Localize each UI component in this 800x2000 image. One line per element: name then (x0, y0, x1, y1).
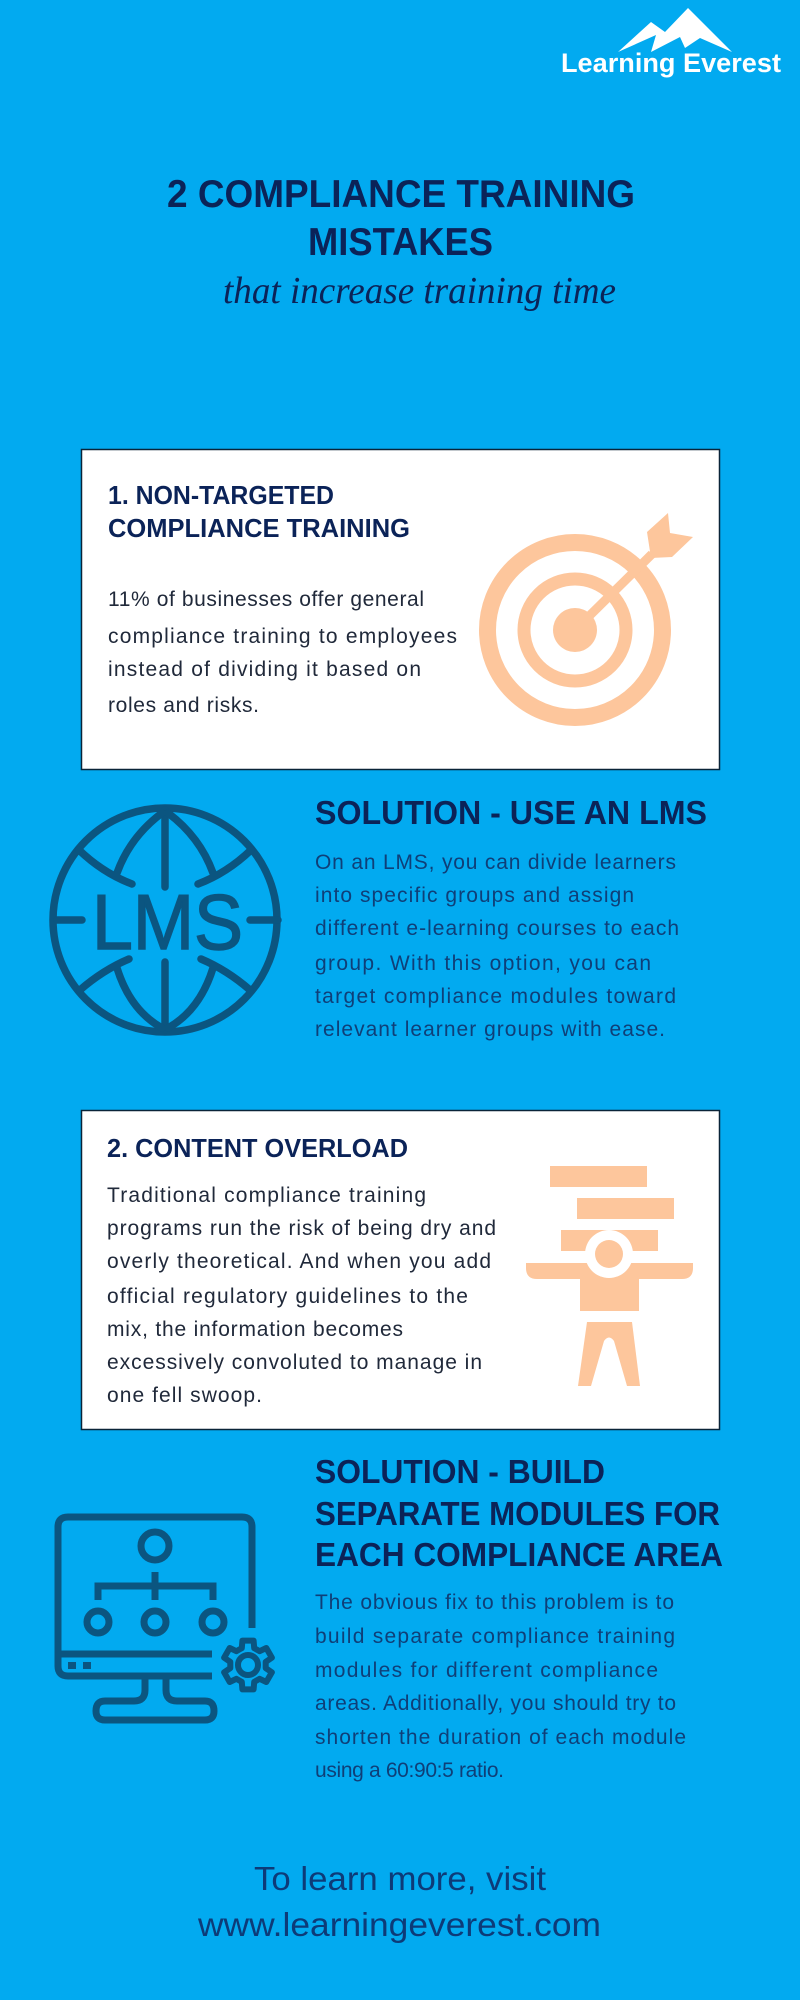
panel: mistake 1 (82, 450, 720, 770)
body text: modules for different compliance (315, 1659, 658, 1682)
subtitle script: that increase training time (223, 270, 616, 312)
logo wordmark: Learning Everest (561, 48, 781, 78)
body text: 11% of businesses offer general (108, 588, 424, 611)
body text: using a 60:90:5 ratio. (315, 1759, 504, 1782)
body text: different e-learning courses to each (315, 917, 679, 940)
footer call to action: www.learningeverest.com (197, 1906, 601, 1943)
icon: person overloaded with blocks (526, 1166, 693, 1386)
body text: mix, the information becomes (107, 1318, 403, 1341)
body text: excessively convoluted to manage in (107, 1351, 482, 1374)
card background (82, 1110, 720, 1430)
body text: compliance training to employees (108, 625, 457, 648)
footer call to action: To learn more, visit (254, 1860, 546, 1897)
icon: mountain (618, 8, 732, 52)
panel: solution 1 (53, 794, 707, 1041)
heading: EACH COMPLIANCE AREA (315, 1536, 723, 1573)
body text: instead of dividing it based on (108, 658, 421, 681)
heading: SOLUTION - BUILD (315, 1453, 605, 1490)
body text: into specific groups and assign (315, 884, 634, 907)
body text: group. With this option, you can (315, 952, 651, 975)
heading (108, 480, 410, 543)
panel: solution 2 (58, 1453, 723, 1782)
heading: SEPARATE MODULES FOR (315, 1495, 720, 1532)
body text: one fell swoop. (107, 1384, 262, 1407)
body text: On an LMS, you can divide learners (315, 851, 676, 874)
body text: overly theoretical. And when you add (107, 1250, 491, 1273)
footer call to action (197, 1860, 601, 1943)
body text: shorten the duration of each module (315, 1726, 686, 1749)
body text: Traditional compliance training (107, 1184, 426, 1207)
heading (315, 1453, 723, 1573)
heading: 1. NON-TARGETED (108, 480, 334, 510)
body text (315, 851, 679, 1041)
icon: monitor with hierarchy and gear (58, 1517, 272, 1720)
heading: SOLUTION - USE AN LMS (315, 794, 707, 831)
heading: COMPLIANCE TRAINING (108, 513, 410, 543)
body text: programs run the risk of being dry and (107, 1217, 496, 1240)
body text: areas. Additionally, you should try to (315, 1692, 676, 1715)
body text: roles and risks. (108, 694, 259, 717)
icon: target with arrow (488, 513, 693, 718)
icon: LMS globe: LMS (92, 878, 243, 966)
body text: target compliance modules toward (315, 985, 676, 1008)
body text: build separate compliance training (315, 1625, 675, 1648)
body text: official regulatory guidelines to the (107, 1285, 468, 1308)
body text (315, 1591, 686, 1782)
panel: mistake 2 (82, 1110, 720, 1430)
body text (108, 588, 457, 717)
icon: LMS globe (53, 808, 278, 1032)
body text: The obvious fix to this problem is to (315, 1591, 674, 1614)
body text (107, 1184, 496, 1407)
card background (82, 450, 720, 770)
body text: relevant learner groups with ease. (315, 1018, 665, 1041)
title (167, 173, 635, 312)
title line 1: 2 COMPLIANCE TRAINING (167, 173, 635, 216)
heading: 2. CONTENT OVERLOAD (107, 1133, 408, 1163)
title line 2: MISTAKES (308, 221, 493, 264)
logo: Learning Everest (561, 8, 781, 78)
